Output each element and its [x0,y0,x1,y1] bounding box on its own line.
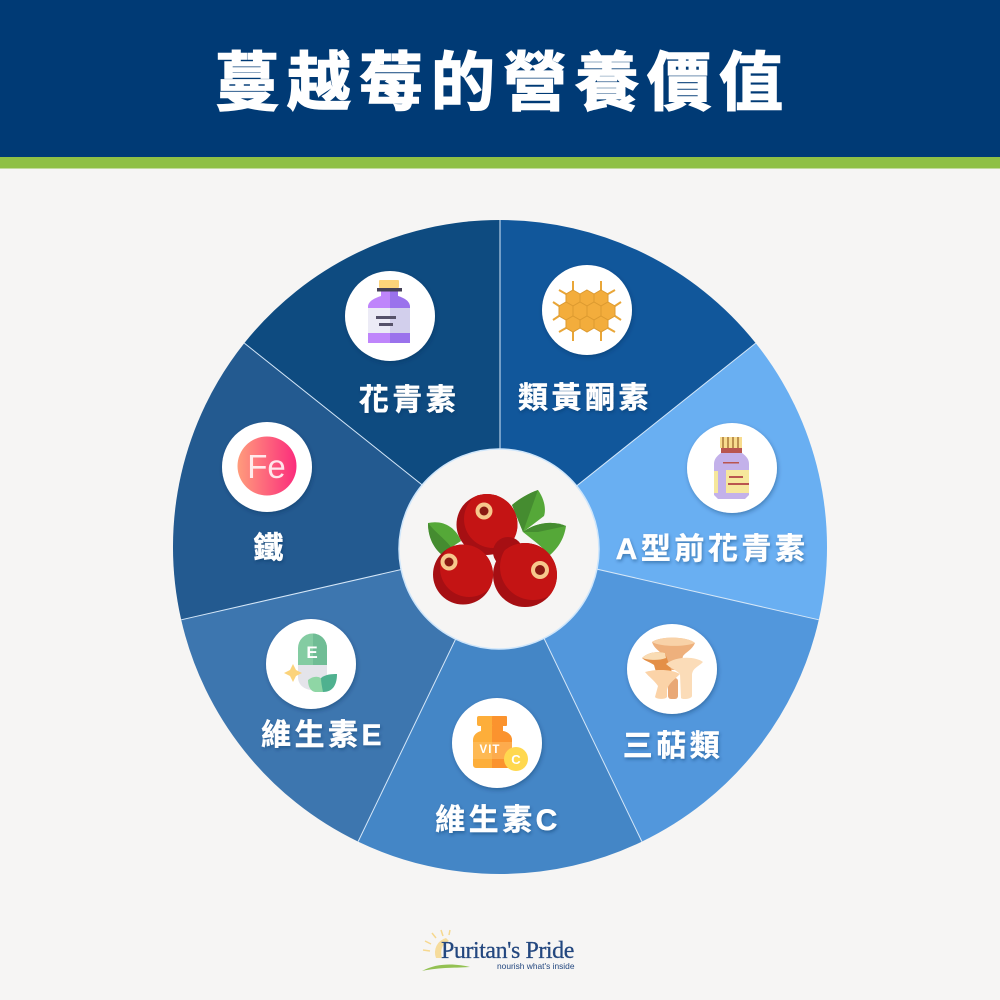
pie chart of nutrients [173,220,827,874]
label: 維生素E: 維生素E [261,719,385,752]
slice: 鐵 [173,343,500,620]
slice: A型前花青素 [500,343,827,620]
icon: iron Fe [222,422,312,512]
slice: 維生素E [181,547,500,842]
slice: 維生素C [358,547,642,874]
icon: proanthocyanidin bottle [687,423,777,513]
icon: flavonoid honeycomb [542,265,632,355]
label: 花青素: 花青素 [359,384,459,417]
slice: 類黃酮素 [500,220,756,547]
icon: triterpene mushrooms [627,624,717,714]
label: 維生素C: 維生素C [435,804,561,837]
label: 類黃酮素: 類黃酮素 [518,382,652,415]
label: 鐵: 鐵 [253,532,287,565]
icon: vitamin C bottle: VIT [480,744,500,756]
logo: Puritan's Pride [422,930,575,971]
icon: vitamin E capsule [266,619,356,709]
label: 三萜類: 三萜類 [623,730,723,763]
icon: cranberries [433,490,566,607]
logo: Puritan's Pride: nourish what's inside [497,961,575,971]
icon: vitamin C bottle: C [511,752,521,767]
icon: anthocyanin bottle [345,271,435,361]
slice: 三萜類 [500,547,819,842]
icon: iron Fe: Fe [247,448,286,485]
icon: vitamin E capsule: E [306,643,318,662]
logo: Puritan's Pride: Puritan's Pride [441,938,574,964]
icon: leaves [428,490,566,555]
title: 蔓越莓的營養價值 [215,47,791,119]
header banner [0,0,1000,168]
slice: 花青素 [244,220,500,547]
center circle with cranberries [399,449,599,649]
icon: vitamin C bottle [452,698,542,788]
label: A型前花青素: A型前花青素 [616,533,808,566]
